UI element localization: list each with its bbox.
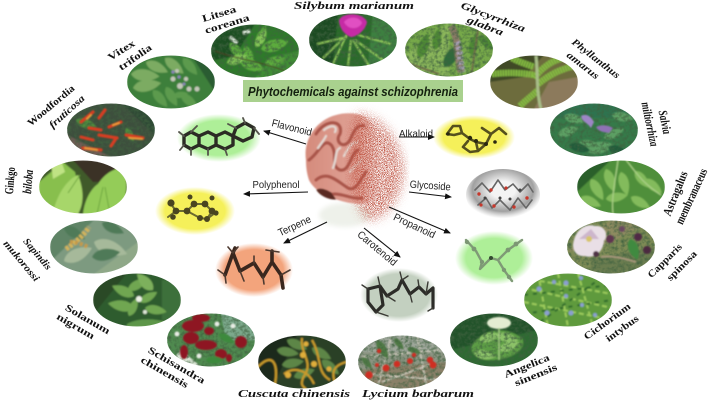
photo: Silybum marianum — [309, 13, 397, 67]
label: Ginkgo biloba — [2, 167, 36, 195]
label: Lycium barbarum: Lycium barbarum — [360, 389, 474, 400]
label: Vitex trifolia — [106, 38, 154, 73]
plant: Solanum nigrum — [54, 273, 181, 343]
label: Salvia miltiorrhiza: miltiorrhiza — [638, 101, 661, 148]
arrow and label: Alkaloid: Alkaloid — [399, 128, 433, 140]
label: Solanum nigrum: Solanum — [63, 303, 112, 338]
label: Solanum nigrum: nigrum — [54, 312, 97, 343]
arrow and label: Terpene: Terpene — [276, 213, 313, 239]
label: Woodfordia fruticosa: Woodfordia — [26, 83, 77, 129]
arrow and label: Carotenoid: Carotenoid — [355, 229, 399, 269]
photo: Capparis spinosa — [567, 220, 655, 274]
photo: Cichorium intybus — [524, 273, 612, 327]
plant: Ginkgo biloba — [2, 160, 127, 214]
plant: Astragalus membranaceus — [577, 160, 708, 226]
label: Schisandra chinensis — [139, 345, 207, 391]
plant: Vitex trifolia — [106, 38, 215, 112]
label: Woodfordia fruticosa — [26, 83, 87, 131]
arrow and label: Polyphenol: Polyphenol — [252, 179, 300, 191]
label: Astragalus membranaceus — [660, 166, 708, 226]
arrow and label: Polyphenol — [244, 179, 308, 194]
plant: Litsea coreana — [201, 4, 299, 78]
label: Woodfordia fruticosa: fruticosa — [47, 93, 87, 131]
label: Salvia miltiorrhiza — [638, 101, 674, 148]
label: Astragalus membranaceus: Astragalus — [660, 169, 691, 218]
molecule: flavonoid — [177, 114, 261, 162]
brain dust particles — [350, 114, 404, 220]
arrow and label: Propanoid — [389, 207, 450, 241]
photo: Ginkgo biloba — [39, 160, 127, 214]
photo: Solanum nigrum — [93, 273, 181, 327]
label: Capparis spinosa: Capparis — [646, 242, 685, 281]
label: Schisandra chinensis: chinensis — [139, 355, 190, 391]
arrow and label: Glycoside: Glycoside — [409, 179, 451, 193]
title — [243, 80, 463, 102]
label: Capparis spinosa — [646, 242, 700, 284]
label: Angelica sinensis — [503, 353, 559, 389]
photo: Schisandra chinensis — [167, 313, 255, 367]
brain body — [306, 113, 380, 204]
label: Litsea coreana: coreana — [204, 13, 251, 37]
label: Angelica sinensis: Angelica — [503, 353, 551, 381]
label: Glycyrrhiza glabra — [459, 0, 527, 39]
photo: Sapindis mukorossi — [50, 219, 138, 274]
photo: Glycyrrhiza glabra — [405, 23, 499, 77]
arrow and label: Flavonoid: Flavonoid — [270, 117, 313, 139]
photo: Phyllanthus amarus — [490, 55, 578, 109]
label: Schisandra chinensis: Schisandra — [146, 345, 207, 387]
label: Vitex trifolia: Vitex — [106, 38, 137, 63]
photo: Salvia miltiorrhiza — [550, 103, 638, 159]
plant: Sapindus mukorossi — [1, 219, 138, 284]
plant: Cichorium intybus — [524, 273, 641, 345]
label: Cuscuta chinensis: Cuscuta chinensis — [238, 389, 350, 400]
molecule: alkaloid — [433, 115, 515, 159]
label: Litsea coreana: Litsea — [201, 4, 238, 25]
label: Solanum nigrum — [54, 303, 112, 343]
molecule: glycoside — [466, 169, 540, 221]
label: Ginkgo biloba: biloba — [20, 169, 36, 194]
photo: Litsea coreana — [211, 24, 299, 78]
label: Cichorium intybus: intybus — [604, 313, 641, 345]
label: Phyllanthus amarus: amarus — [564, 50, 601, 82]
plant: Angelica sinensis — [450, 313, 559, 389]
photo: Lycium barbarum — [358, 335, 446, 389]
plant: Lycium barbarum — [358, 335, 474, 400]
label: Glycyrrhiza glabra: Glycyrrhiza — [459, 0, 527, 35]
label: Litsea coreana — [201, 4, 251, 37]
molecule: polyphenol — [155, 187, 235, 235]
label: Sapindis mukorossi: mukorossi — [1, 239, 41, 284]
plant: Woodfordia fruticosa — [26, 83, 155, 157]
molecule: terpene — [215, 243, 293, 297]
label: Cichorium intybus — [582, 301, 641, 345]
label: Angelica sinensis: sinensis — [513, 362, 559, 389]
plant: Schisandra chinensis — [139, 313, 255, 391]
title: Phytochemicals against schizophrenia — [248, 84, 458, 99]
photo: Woodfordia fruticosa — [67, 103, 155, 157]
photo: Angelica sinensis — [450, 313, 538, 367]
label: Cichorium intybus: Cichorium — [582, 301, 634, 343]
photo: Astragalus membranaceus — [577, 160, 665, 214]
photo: Cuscuta chinensis — [258, 335, 346, 389]
arrow and label: Terpene — [276, 213, 327, 243]
brain illustration — [306, 113, 404, 227]
plant: Silybum marianum — [294, 1, 414, 67]
arrow and label: Flavonoid — [264, 117, 313, 144]
label: Sapindis mukorossi — [1, 236, 53, 284]
brain shadow — [319, 203, 371, 227]
molecule: carotenoid — [360, 268, 438, 322]
arrow and label: Propanoid: Propanoid — [391, 211, 437, 241]
label: Salvia miltiorrhiza: Salvia — [656, 109, 674, 135]
label: Ginkgo biloba: Ginkgo — [2, 167, 18, 195]
label: Vitex trifolia: trifolia — [117, 43, 154, 73]
label: Sapindis mukorossi: Sapindis — [20, 236, 53, 273]
plant: Phyllanthus amarus — [490, 37, 622, 109]
label: Phyllanthus amarus: Phyllanthus — [569, 37, 622, 81]
photo: Vitex trifolia — [127, 54, 215, 112]
label: Capparis spinosa: spinosa — [665, 249, 700, 284]
label: Phyllanthus amarus — [564, 37, 622, 82]
plant: Salvia miltiorrhiza — [550, 101, 674, 159]
molecule: propanoid — [455, 231, 533, 285]
label: Silybum marianum: Silybum marianum — [294, 1, 414, 12]
plant: Capparis spinosa — [567, 220, 700, 284]
plant: Cuscuta chinensis — [238, 335, 350, 400]
label: Glycyrrhiza glabra: glabra — [464, 14, 505, 39]
plant: Glycyrrhiza glabra — [405, 0, 527, 77]
